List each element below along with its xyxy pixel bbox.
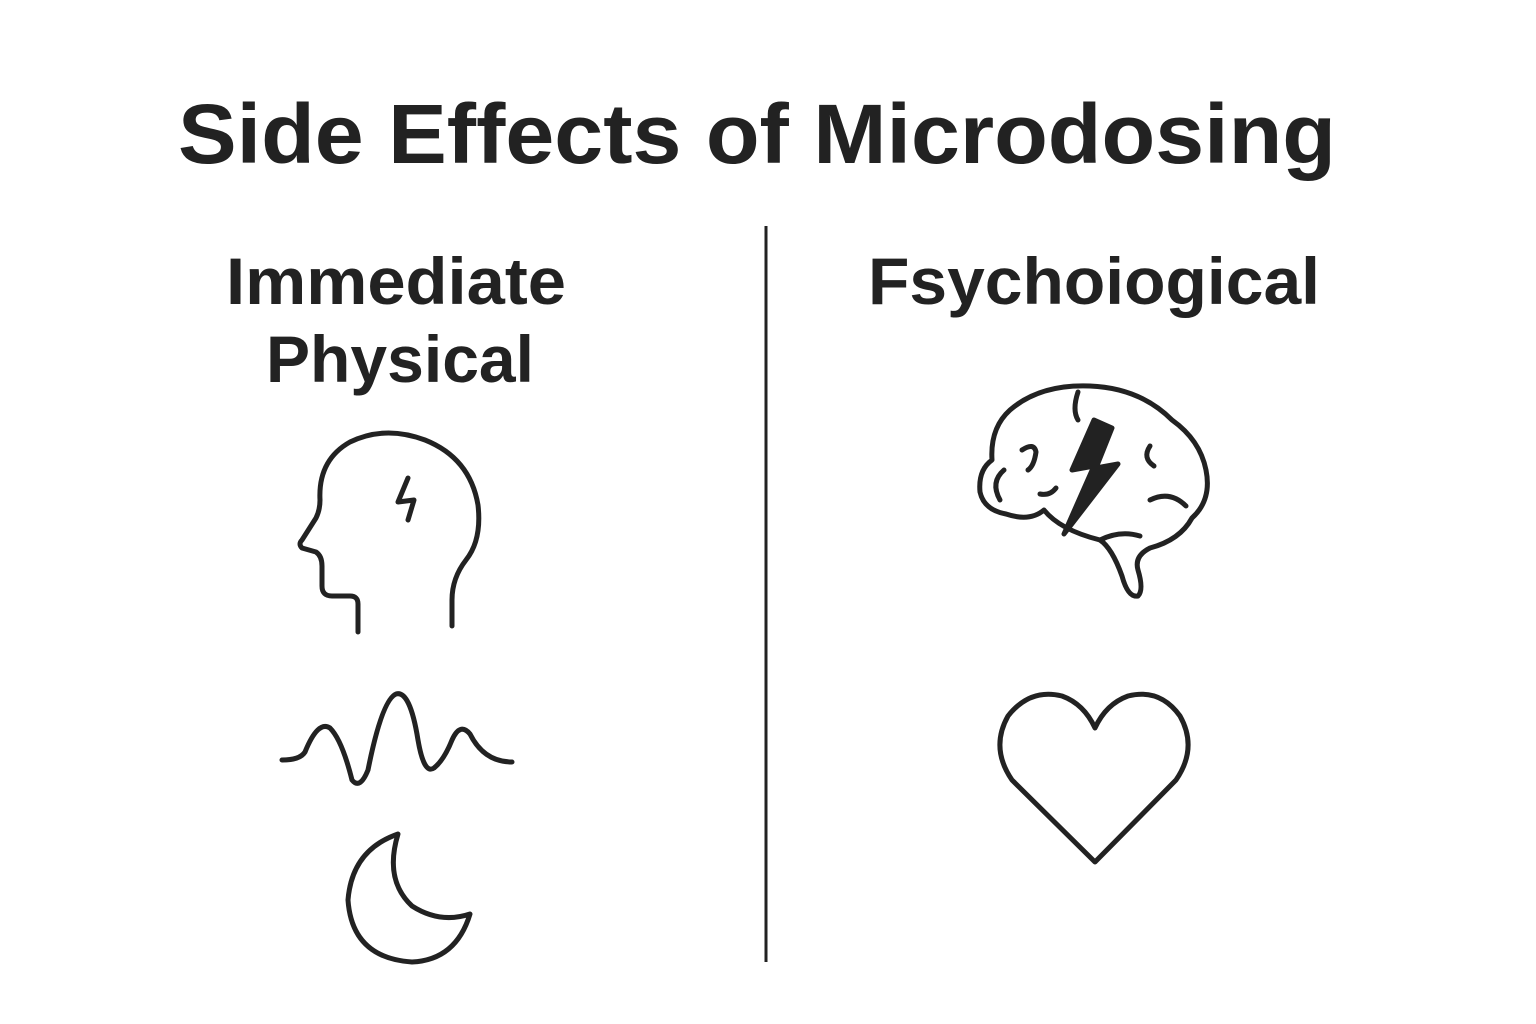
heading: immediate physical: Immediate (226, 244, 566, 318)
icon: wave (282, 694, 512, 783)
icon: head with headache (300, 433, 479, 632)
title: Side Effects of Microdosing (178, 87, 1336, 181)
icon: brain with lightning (980, 386, 1207, 596)
icon: moon (348, 834, 470, 962)
heading: immediate physical (226, 244, 566, 396)
heading: psychological: Fsychoiogical (868, 244, 1320, 318)
heading: immediate physical: Physical (266, 322, 534, 396)
icon: heart (1000, 694, 1188, 862)
